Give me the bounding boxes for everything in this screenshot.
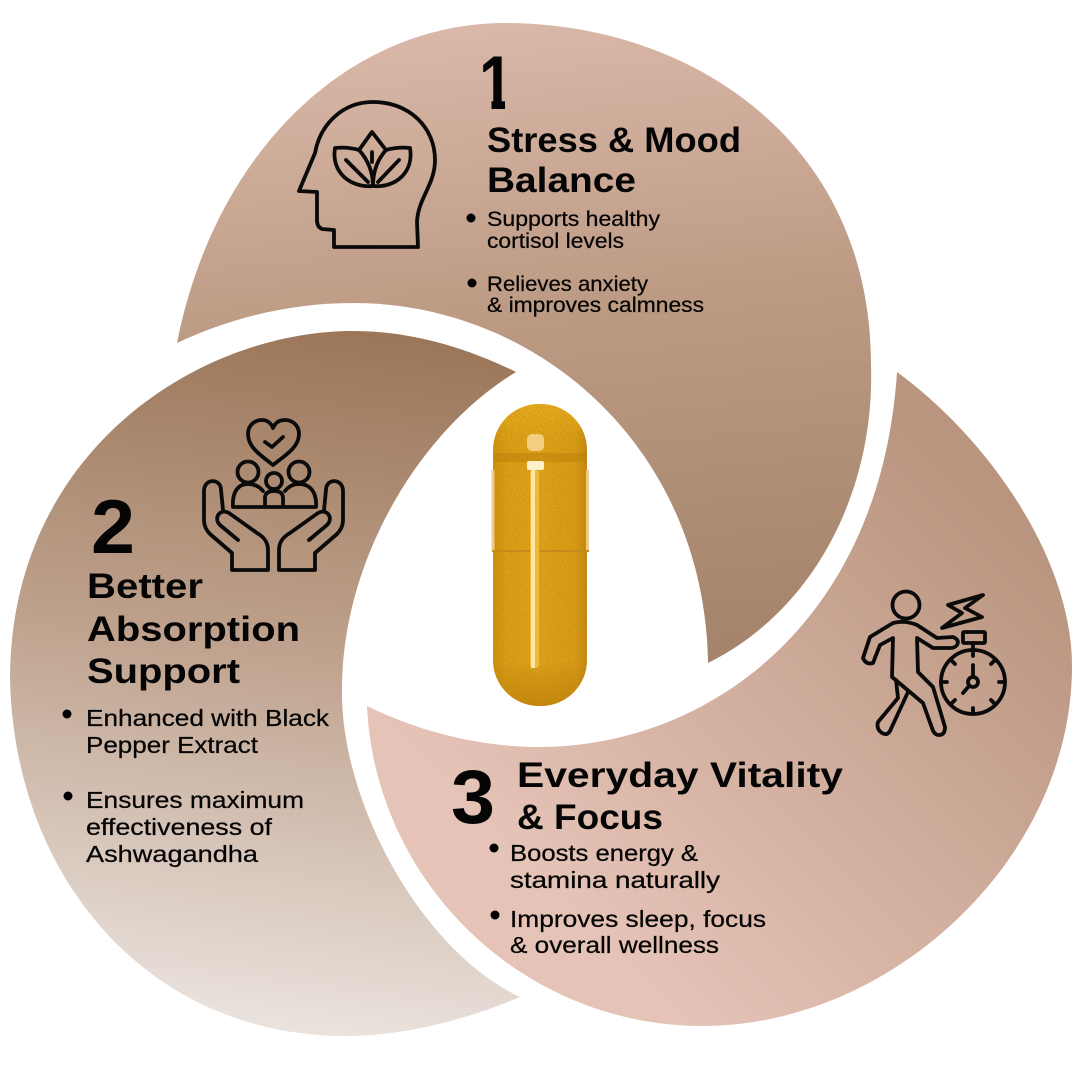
- group: vitality content: [451, 592, 1005, 958]
- bullet list: vitality: Boosts energy &: [510, 840, 698, 866]
- number 1: 1: [479, 41, 513, 126]
- bullet list: absorption: Ashwagandha: [86, 841, 258, 867]
- bullet list: stress: cortisol levels: [487, 230, 624, 253]
- heading: everyday vitality and focus: & Focus: [517, 798, 663, 837]
- heading: stress and mood balance: Stress & Mood: [487, 121, 741, 160]
- number 3: 3: [451, 755, 495, 840]
- panel: better absorption support petal: [10, 331, 520, 1036]
- number 2: 2: [91, 485, 135, 570]
- panel: everyday vitality and focus petal: [367, 372, 1072, 1026]
- bullet list: absorption: Enhanced with Black: [86, 705, 330, 731]
- bullet list: stress: Relieves anxiety: [487, 273, 649, 296]
- bullet list: absorption: [62, 705, 330, 867]
- bullet list: vitality: [490, 840, 766, 958]
- heading: better absorption support: [87, 567, 300, 691]
- heading: stress and mood balance: [487, 121, 741, 200]
- icon: walking person with stopwatch and bolt: [863, 592, 1005, 735]
- icon: hands holding family and heart: [204, 420, 343, 570]
- bullet list: vitality: Improves sleep, focus: [510, 906, 766, 932]
- bullet list: absorption: Ensures maximum: [86, 787, 304, 813]
- bullet list: vitality: stamina naturally: [510, 867, 721, 893]
- group: stress and mood content: [299, 41, 741, 317]
- image: turmeric capsule: [492, 404, 589, 706]
- bullet list: stress: Supports healthy: [487, 208, 661, 231]
- bullet list: vitality: & overall wellness: [510, 932, 719, 958]
- bullet list: absorption: Pepper Extract: [86, 732, 259, 758]
- bullet list: stress: [466, 208, 704, 317]
- group: absorption content: [62, 420, 343, 867]
- bullet list: absorption: effectiveness of: [86, 814, 273, 840]
- panel: stress and mood balance petal: [177, 23, 871, 663]
- heading: stress and mood balance: Balance: [487, 161, 636, 200]
- heading: better absorption support: Absorption: [87, 610, 300, 649]
- heading: everyday vitality and focus: [517, 756, 844, 837]
- heading: better absorption support: Support: [87, 652, 240, 691]
- heading: better absorption support: Better: [87, 567, 203, 606]
- heading: everyday vitality and focus: Everyday Vitality: [517, 756, 844, 795]
- bullet list: stress: & improves calmness: [487, 294, 704, 317]
- icon: head with leaves: [299, 102, 435, 247]
